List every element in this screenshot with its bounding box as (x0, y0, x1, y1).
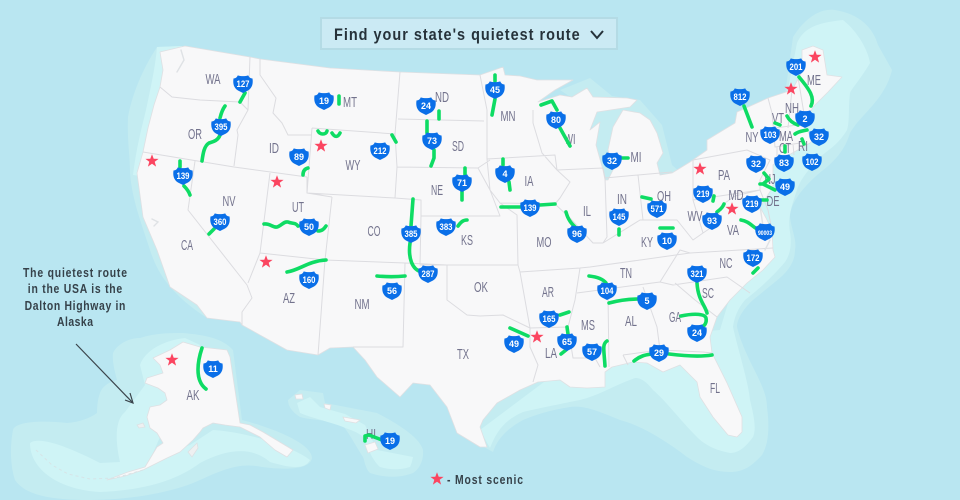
coastal shallows: east and gulf inner (480, 20, 870, 453)
route 160 (287, 260, 326, 289)
route 80: 80 (551, 115, 561, 125)
route 127 (233, 75, 253, 102)
legend: most scenic: - Most scenic (447, 473, 523, 487)
state label: UT: UT (292, 199, 304, 216)
route 19 Montana: 19 (319, 96, 329, 106)
dropdown: find your state's quietest route (321, 18, 617, 49)
route 103 (760, 123, 780, 144)
coastal shallows: west coast outer (128, 46, 240, 320)
state label: CT: CT (779, 140, 791, 157)
state label: NY: NY (746, 129, 758, 146)
state label: CO: CO (368, 223, 380, 240)
state label: MS: MS (581, 317, 595, 334)
callout: quietest route text (23, 266, 127, 329)
route 102: 102 (806, 157, 818, 167)
state label: MI: MI (630, 149, 642, 166)
state label: MD: MD (728, 187, 744, 204)
coastal shallows: east and gulf outer (470, 10, 892, 472)
route 4 (495, 159, 515, 190)
state label: ND: ND (435, 89, 449, 106)
route 83: 83 (779, 158, 789, 168)
route 32 Massachusetts (795, 128, 829, 146)
route 56 (377, 276, 405, 300)
state label: MO: MO (536, 234, 552, 251)
route 29 (634, 344, 712, 362)
state label: SD: SD (452, 138, 464, 155)
state label: OR: OR (188, 126, 202, 143)
state label: PA: PA (718, 167, 730, 184)
route 32 Michigan: 32 (607, 156, 617, 166)
route 32 Pennsylvania (746, 155, 766, 173)
state label: AK: AK (186, 387, 200, 404)
route 321: 321 (690, 269, 704, 279)
route 50: 50 (304, 222, 314, 232)
state label: MN: MN (500, 108, 516, 125)
callout: quietest route text: in the USA is the (28, 282, 123, 296)
state label: KS: KS (461, 232, 473, 249)
callout: quietest route text: Alaska (57, 315, 93, 329)
Aleutian islands (36, 450, 143, 479)
route 139 California (173, 161, 193, 195)
coastal shallows: Alaska outer (11, 333, 312, 500)
route 96 (566, 212, 587, 243)
route 73: 73 (427, 136, 437, 146)
scenic star: Wyoming (314, 139, 328, 152)
route 395: 395 (214, 122, 228, 132)
state label: SC: SC (702, 285, 714, 302)
route 65: 65 (562, 337, 572, 347)
route 812 (730, 88, 752, 127)
scenic star: Pennsylvania (693, 162, 707, 175)
state label: ME: ME (807, 72, 821, 89)
route 32 Massachusetts: 32 (814, 132, 824, 142)
route 32 Pennsylvania: 32 (751, 159, 761, 169)
callout: quietest route text: The quietest route (23, 266, 127, 280)
route 360: 360 (214, 217, 226, 227)
scenic star: Louisiana (530, 330, 544, 343)
route 24 Georgia: 24 (692, 328, 702, 338)
state label: ID: ID (269, 140, 279, 157)
route 57: 57 (587, 347, 597, 357)
route 385 (401, 199, 422, 272)
route 145: 145 (612, 212, 626, 222)
route 219 Pennsylvania (693, 185, 714, 203)
coastal shallows: Hawaii outer (288, 390, 423, 477)
route 212: 212 (374, 146, 386, 156)
route 360 (209, 213, 230, 234)
scenic star: Alaska (165, 353, 179, 366)
coastal shallows: west coast inner (133, 46, 182, 180)
route 19 Hawaii: 19 (385, 436, 395, 446)
state label: OH: OH (657, 188, 671, 205)
route segments Wyoming north (318, 131, 340, 136)
route 50 (264, 218, 326, 236)
Alaska landmass (107, 342, 293, 480)
route 49 New Jersey (760, 173, 795, 196)
dropdown: find your state's quietest route: Find your state's quietest route (334, 26, 580, 44)
route 201 (786, 58, 812, 106)
state label: DE: DE (766, 193, 780, 210)
route 321 (687, 265, 707, 313)
state label: AL: AL (625, 313, 637, 330)
route 4: 4 (502, 169, 508, 179)
state label: GA: GA (669, 309, 681, 326)
state label: WY: WY (346, 157, 360, 174)
coastal shallows: great lakes (560, 78, 680, 185)
route 127: 127 (236, 79, 250, 89)
route 104: 104 (600, 286, 614, 296)
route 571 (642, 197, 667, 218)
route 172: 172 (746, 253, 760, 263)
route 49 Louisiana (504, 328, 528, 353)
route 93: 93 (707, 216, 717, 226)
route 812: 812 (734, 92, 746, 102)
route 24 North Dakota (416, 97, 439, 119)
route 83 (774, 146, 794, 172)
route 73 (422, 121, 442, 166)
route 19 Montana (314, 92, 339, 110)
state label: WA: WA (206, 71, 220, 88)
route 145 (609, 208, 629, 235)
route 10: 10 (662, 236, 672, 246)
callout: quietest route text: Dalton Highway in (25, 299, 125, 313)
state label: RI: RI (798, 138, 808, 155)
route 71: 71 (457, 178, 467, 188)
state label: AZ: AZ (283, 290, 295, 307)
route 103: 103 (764, 130, 776, 140)
state label: WI: WI (564, 131, 576, 148)
route 219 Maryland (742, 195, 767, 213)
route 219 Pennsylvania: 219 (696, 189, 710, 199)
route 383: 383 (440, 222, 452, 232)
route 45 (485, 75, 505, 115)
route 80 (541, 101, 570, 146)
route 56: 56 (387, 286, 397, 296)
route 139 Iowa (501, 199, 555, 217)
scenic star: Maine (808, 50, 822, 63)
state label: OK: OK (474, 279, 488, 296)
coastal shallows: Alaska inner (30, 338, 310, 492)
route 2: 2 (802, 114, 808, 124)
state label: IN: IN (617, 191, 627, 208)
Hawaii islands (295, 394, 378, 453)
state label: IA: IA (524, 173, 534, 190)
route 385: 385 (404, 229, 418, 239)
route 93 (702, 204, 724, 230)
state label: MA: MA (779, 128, 793, 145)
route 10 (657, 228, 677, 250)
route 24 North Dakota: 24 (421, 101, 431, 111)
route 287: 287 (422, 269, 434, 279)
state label: KY: KY (641, 234, 653, 251)
route 24 Georgia (681, 314, 707, 342)
contiguous USA landmass (137, 46, 842, 447)
route 172 (743, 249, 763, 273)
route 2 (787, 110, 815, 128)
scenic star: Arizona (259, 255, 273, 268)
state label: HI: HI (366, 426, 376, 443)
route 90003: 90003 (758, 230, 772, 237)
route 139 Iowa: 139 (524, 203, 536, 213)
state label: NV: NV (222, 193, 236, 210)
state label: NC: NC (720, 255, 733, 272)
route 139 California: 139 (176, 171, 190, 181)
route 201: 201 (790, 62, 802, 72)
route 287 (418, 265, 438, 283)
route 160: 160 (302, 275, 316, 285)
route 96: 96 (572, 229, 582, 239)
state label: LA: LA (545, 345, 557, 362)
scenic star: New Hampshire (784, 82, 798, 95)
route 395 (202, 106, 231, 161)
state label: TN: TN (620, 265, 632, 282)
route 90003 (741, 220, 775, 241)
route 45: 45 (490, 85, 500, 95)
route 89: 89 (294, 152, 304, 162)
state label: VA: VA (727, 222, 739, 239)
state borders (143, 57, 805, 382)
state label: IL: IL (583, 203, 591, 220)
state label: NH: NH (785, 100, 799, 117)
Kodiak and Nunivak islands (137, 423, 198, 457)
route 571: 571 (650, 204, 664, 214)
route 104 (589, 276, 617, 300)
route 165: 165 (542, 314, 556, 324)
state label: TX: TX (457, 346, 469, 363)
route 5: 5 (644, 296, 650, 306)
scenic star: Virginia (725, 202, 739, 215)
route 383 (436, 218, 467, 236)
state label: NE: NE (431, 182, 443, 199)
route 57 (582, 341, 607, 366)
coastal shallows: Hawaii inner (297, 397, 413, 469)
route 212 (370, 135, 396, 160)
state label: VT: VT (772, 110, 784, 127)
route 32 Michigan (602, 152, 628, 170)
route 11 Dalton Highway: 11 (208, 364, 218, 374)
route 71 (452, 168, 472, 200)
state label: WV: WV (688, 208, 702, 225)
route 11 Dalton Highway (198, 348, 223, 389)
route 102 (802, 139, 822, 171)
route 49 Louisiana: 49 (509, 339, 519, 349)
state label: NJ: NJ (764, 171, 776, 188)
route 29: 29 (654, 348, 664, 358)
route 5 (609, 292, 657, 310)
scenic star: California north (145, 154, 159, 167)
state label: MT: MT (343, 94, 357, 111)
state label: AR: AR (542, 284, 554, 301)
route 49 New Jersey: 49 (780, 182, 790, 192)
route 65 (557, 327, 577, 354)
route 19 Hawaii (365, 432, 400, 450)
route 89 (289, 148, 309, 175)
route 165 (539, 310, 569, 328)
state label: NM: NM (354, 296, 370, 313)
state label: FL: FL (710, 380, 720, 397)
scenic star: Utah north (270, 175, 284, 188)
arrow: callout to Alaska (76, 344, 133, 403)
route 219 Maryland: 219 (746, 199, 758, 209)
coastal detail: Puget Sound, bays and Chesapeake (152, 50, 770, 250)
state label: CA: CA (181, 237, 193, 254)
